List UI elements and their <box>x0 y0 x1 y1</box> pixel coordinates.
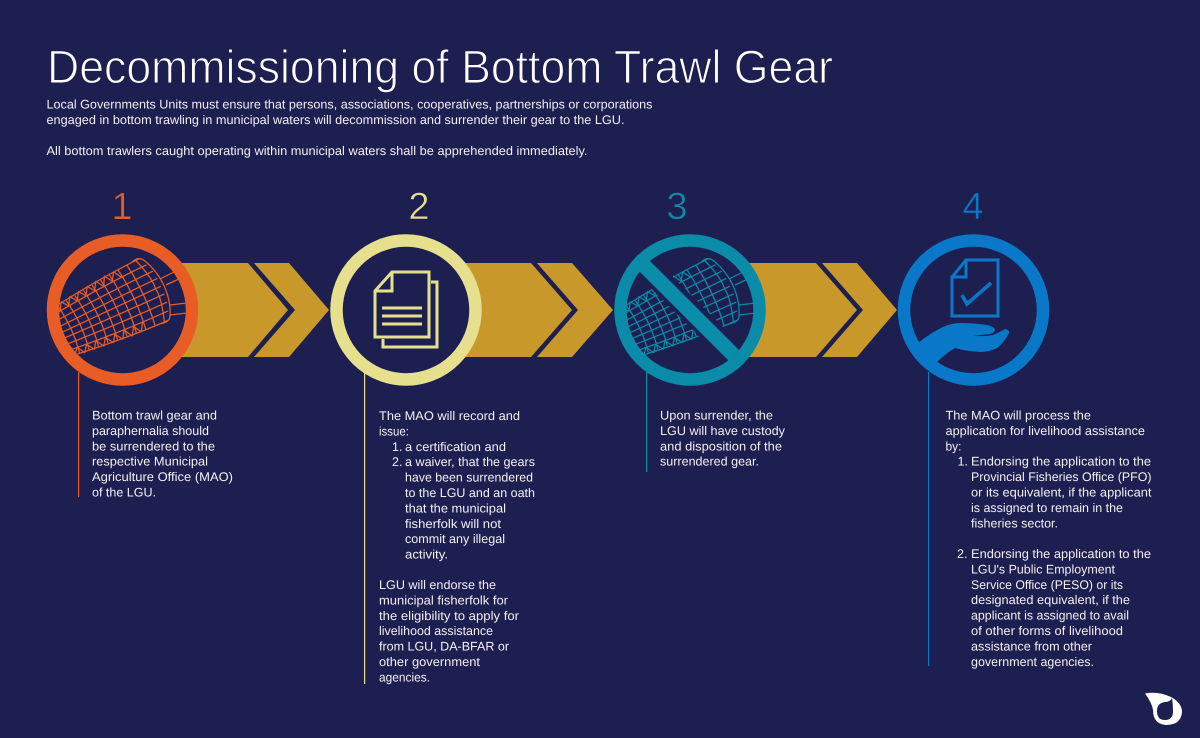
text: step 4: by: <box>946 439 962 453</box>
step number 2: 2 <box>408 186 430 228</box>
text: step 2: 2. <box>392 455 402 469</box>
icon: documents in pale ring <box>336 240 476 380</box>
text: step 2: to the LGU and an oath <box>405 486 535 500</box>
text: step 2: 1. <box>392 440 402 454</box>
text: step 2: other government <box>379 655 481 669</box>
icon: logo <box>1145 693 1182 725</box>
step number 1: 1 <box>111 186 133 228</box>
text: step 4: Service Office (PESO) or its <box>971 578 1123 592</box>
text: step 4: fisheries sector. <box>971 516 1058 530</box>
text: step 1: respective Municipal <box>92 455 208 469</box>
text: step 3: surrendered gear. <box>660 455 759 469</box>
text: step 4 <box>946 408 1152 669</box>
text: step 2: issue: <box>379 424 409 438</box>
intro text: engaged in bottom trawling in municipal waters will decommission and surrender their gear to the LGU. <box>46 113 625 127</box>
arrow: step 2 to 3 <box>453 263 613 357</box>
text: step 2: fisherfolk will not <box>405 517 502 531</box>
step number 3: 3 <box>666 186 688 228</box>
text: step 1 <box>92 408 233 500</box>
text: step 4: government agencies. <box>971 655 1094 669</box>
icon: prohibited net in teal ring <box>612 240 760 380</box>
connector line 4 <box>928 372 929 666</box>
text: step 2: a certification and <box>405 440 506 454</box>
text: step 2: commit any illegal <box>405 532 505 546</box>
text: step 2: from LGU, DA-BFAR or <box>379 640 509 654</box>
text: step 4: is assigned to remain in the <box>971 501 1123 515</box>
connector line 1 <box>78 372 79 497</box>
text: step 4: Provincial Fisheries Office (PFO) <box>971 470 1152 484</box>
icon: hand holding checked document in blue ring <box>904 240 1043 380</box>
title: Decommissioning of Bottom Trawl Gear <box>47 40 833 93</box>
text: step 4: or its equivalent, if the applicant <box>971 486 1152 500</box>
text: step 3: and disposition of the <box>660 439 782 453</box>
text: step 3: LGU will have custody <box>660 424 786 438</box>
text: step 2: The MAO will record and <box>379 409 520 423</box>
text: step 1: paraphernalia should <box>92 424 209 438</box>
text: step 1: of the LGU. <box>92 486 156 500</box>
text: step 2 <box>379 409 535 684</box>
text: step 2: agencies. <box>379 670 430 684</box>
text: step 4: Endorsing the application to the <box>971 455 1151 469</box>
text: step 2: livelihood assistance <box>379 624 493 638</box>
text: step 4: 2. <box>957 547 967 561</box>
text: step 2: activity. <box>405 548 448 562</box>
text: step 2: municipal fisherfolk for <box>379 593 508 607</box>
step number 4: 4 <box>962 186 984 228</box>
text: step 3 <box>660 408 786 469</box>
arrow: step 3 to 4 <box>738 263 897 357</box>
text: step 2: that the municipal <box>405 501 506 515</box>
intro text <box>46 98 652 158</box>
connector line 3 <box>646 372 647 472</box>
text: step 4: designated equivalent, if the <box>971 593 1130 607</box>
arrow: step 1 to 2 <box>170 263 329 357</box>
text: step 1: Agriculture Office (MAO) <box>92 470 233 484</box>
text: step 1: Bottom trawl gear and <box>92 408 217 422</box>
text: step 4: 1. <box>958 455 968 469</box>
text: step 4: application for livelihood assistance <box>946 424 1145 438</box>
text: step 4: The MAO will process the <box>946 408 1091 422</box>
icon: trawl net in orange ring <box>43 240 192 380</box>
connector line 2 <box>364 372 365 684</box>
text: step 2: LGU will endorse the <box>379 578 496 592</box>
text: step 4: applicant is assigned to avail <box>971 609 1129 623</box>
text: step 1: be surrendered to the <box>92 439 215 453</box>
text: step 2: a waiver, that the gears <box>405 455 535 469</box>
text: step 4: Endorsing the application to the <box>971 547 1151 561</box>
text: step 4: of other forms of livelihood <box>971 624 1123 638</box>
text: step 2: have been surrendered <box>405 471 533 485</box>
text: step 4: assistance from other <box>971 639 1092 653</box>
text: step 2: the eligibility to apply for <box>379 609 519 623</box>
intro text: All bottom trawlers caught operating within municipal waters shall be apprehended immediately. <box>46 144 588 158</box>
text: step 4: LGU's Public Employment <box>971 562 1116 576</box>
text: step 3: Upon surrender, the <box>660 408 773 422</box>
intro text: Local Governments Units must ensure that persons, associations, cooperatives, partnerships or corporations <box>46 98 652 112</box>
